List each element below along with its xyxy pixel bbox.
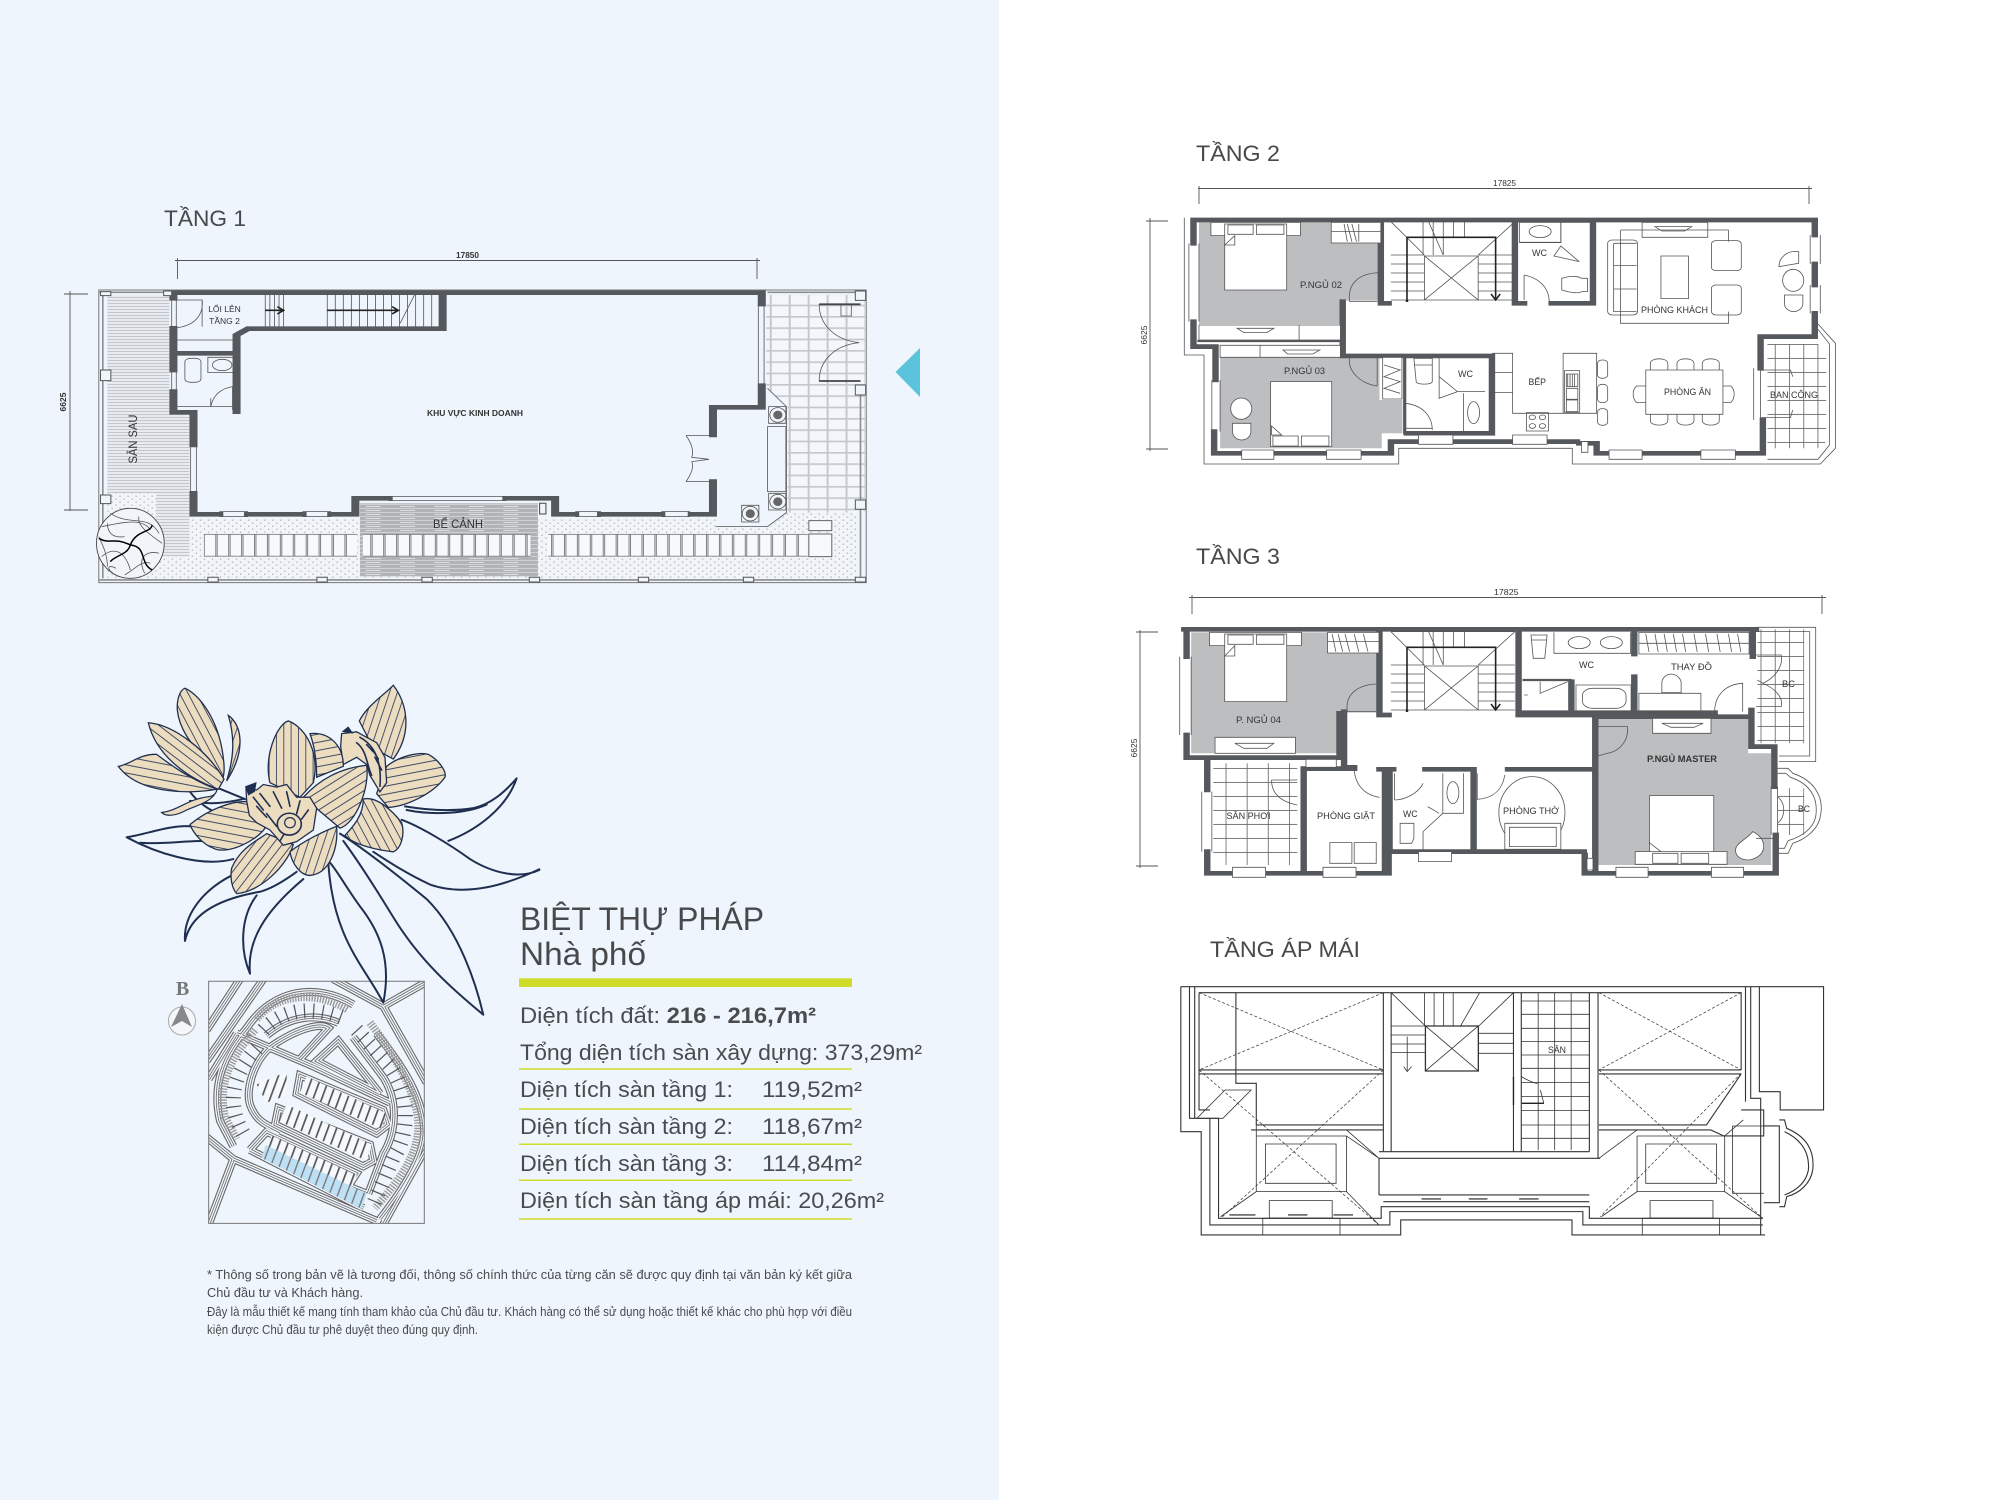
room labels: tầng 1: TẦNG 2: [209, 316, 240, 326]
room labels: tầng 1: [127, 303, 523, 531]
row: floor 1 area: Diện tích sàn tầng 1:: [520, 1077, 733, 1102]
dimension: depth 6625: [58, 291, 88, 511]
dimension: width 17850: [175, 250, 760, 279]
footnote: kiện được Chủ đầu tư phê duyệt theo đúng quy định.: [207, 1323, 478, 1337]
furniture: altar room: [1477, 773, 1565, 849]
room labels: tầng 1: LỐI LÊN: [208, 303, 241, 314]
entrance arrow: [896, 348, 920, 397]
room labels: tầng 3: SÂN PHƠI: [1226, 811, 1270, 821]
room labels: tầng 2: P.NGỦ 02: [1300, 279, 1342, 290]
row: floor 1 area: [519, 1077, 862, 1110]
dimension: depth 6625: 6625: [58, 392, 68, 411]
room labels: tầng 3: PHÒNG THỜ: [1503, 806, 1559, 816]
dimension: width 17825: 17825: [1493, 178, 1516, 188]
furniture: master bedroom: [1595, 718, 1764, 864]
furniture: laundry: [1272, 767, 1379, 863]
furniture: dressing room: [1639, 632, 1782, 712]
room labels: tầng 2: P.NGỦ 03: [1284, 365, 1325, 376]
room labels: tầng 3: P.NGỦ MASTER: [1647, 753, 1718, 764]
icon: north compass: [168, 978, 196, 1035]
drawing: tầng 2 walls and furniture: [1184, 218, 1835, 464]
furniture: wc upper: [1520, 222, 1592, 303]
dimension: width 17825: [1198, 178, 1812, 204]
icon: tree: [96, 508, 164, 578]
floor plan: tầng 3: [1129, 544, 1826, 877]
room labels: tầng 2: BẾP: [1528, 377, 1546, 387]
heading: tầng áp mái: TẦNG ÁP MÁI: [1210, 937, 1360, 962]
dimension: depth 6625: [1139, 218, 1168, 451]
furniture: lower wc: [1395, 773, 1463, 850]
room labels: tầng 2: BAN CÔNG: [1770, 390, 1818, 400]
room labels: tầng 3: WC: [1403, 809, 1418, 819]
site map with highlighted row: [207, 979, 428, 1224]
left panel background: [0, 0, 999, 1500]
room labels: tầng 1: BỂ CẢNH: [433, 518, 483, 531]
furniture: wc lower: [1414, 358, 1485, 433]
dimension: width 17850: 17850: [456, 250, 479, 260]
room labels: tầng 2: [1284, 248, 1818, 400]
footnote: [207, 1268, 852, 1337]
area specification list: [519, 1003, 922, 1220]
heading: tầng 1: TẦNG 1: [164, 206, 246, 231]
floor plan: tầng 2: [1139, 141, 1835, 464]
leaves: [127, 778, 539, 1015]
icon: north compass: B: [176, 978, 189, 1000]
footnote: Chủ đầu tư và Khách hàng.: [207, 1286, 363, 1300]
flower: left bud: [118, 688, 240, 792]
windows: bottom wall: [1242, 435, 1735, 459]
room labels: tầng 3: BC: [1782, 679, 1796, 689]
room labels: tầng 3: PHÒNG GIẶT: [1317, 811, 1376, 821]
footnote: Đây là mẫu thiết kế mang tính tham khảo của Chủ đầu tư. Khách hàng có thể sử dụng hoặc thiết kế khác cho phù hợp với điều: [207, 1304, 852, 1319]
floor plan: tầng 1: [58, 206, 866, 583]
row: land area: Diện tích đất: 216 - 216,7m²: [520, 1003, 816, 1028]
row: floor 3 area: [519, 1151, 862, 1181]
furniture: living room: [1608, 222, 1804, 323]
room labels: tầng 3: WC: [1579, 660, 1594, 670]
flower: right bloom: [341, 685, 445, 852]
dimension: depth 6625: 6625: [1139, 325, 1149, 344]
row: floor 3 area: Diện tích sàn tầng 3:: [520, 1151, 733, 1176]
drawing: attic roof lines: [1181, 987, 1824, 1235]
room labels: tầng 1: SÂN SAU: [127, 414, 140, 464]
room label: sân: SÂN: [1548, 1045, 1566, 1055]
furniture: kitchen: [1492, 353, 1608, 431]
room labels: tầng 3: BC: [1798, 804, 1810, 814]
row: floor 1 area: 119,52m²: [762, 1077, 862, 1102]
heading: nhà phố: Nhà phố: [520, 936, 646, 972]
room labels: tầng 2: WC: [1532, 248, 1547, 258]
room labels: tầng 2: WC: [1458, 369, 1473, 379]
room labels: tầng 3: [1226, 660, 1810, 821]
windows: bottom and top: [1233, 759, 1744, 877]
title block: [519, 901, 852, 987]
furniture: dining table: [1633, 359, 1734, 425]
room labels: tầng 3: P. NGỦ 04: [1236, 714, 1281, 725]
heading: tầng 3: TẦNG 3: [1196, 544, 1280, 569]
heading: biệt thự pháp: BIỆT THỰ PHÁP: [520, 901, 764, 937]
row: attic area: Diện tích sàn tầng áp mái: 20,26m²: [520, 1188, 884, 1213]
dimension: width 17825: [1189, 587, 1826, 614]
dimension: depth 6625: [1129, 630, 1158, 868]
room labels: tầng 3: THAY ĐỒ: [1671, 661, 1712, 672]
row: floor 3 area: 114,84m²: [762, 1151, 862, 1176]
row: total floor area: Tổng diện tích sàn xây dựng: 373,29m²: [520, 1040, 922, 1065]
room labels: tầng 1: KHU VỰC KINH DOANH: [427, 408, 523, 418]
row: floor 2 area: Diện tích sàn tầng 2:: [520, 1114, 733, 1139]
heading: tầng 2: TẦNG 2: [1196, 141, 1280, 166]
dimension: depth 6625: 6625: [1129, 738, 1139, 757]
floor plan: tầng áp mái: [1181, 937, 1824, 1235]
row: floor 2 area: [519, 1114, 862, 1145]
dimension: width 17825: 17825: [1494, 587, 1519, 597]
furniture: bedroom 04: [1210, 632, 1379, 753]
furniture: bedroom 03: [1220, 345, 1432, 447]
accent bar: [519, 978, 852, 987]
row: floor 2 area: 118,67m²: [762, 1114, 862, 1139]
flower: centre bloom: [190, 721, 367, 894]
room labels: tầng 2: PHÒNG ĂN: [1664, 387, 1711, 397]
room labels: tầng 2: PHÒNG KHÁCH: [1641, 305, 1708, 315]
furniture: bedroom 02: [1199, 222, 1381, 340]
footnote: * Thông số trong bản vẽ là tương đối, thông số chính thức của từng căn sẽ được quy định tại văn bản ký kết giữa: [207, 1268, 852, 1282]
furniture: upper wc: [1524, 632, 1631, 712]
drawing: tầng 3 walls and furniture: [1180, 627, 1821, 877]
drawing: tầng 1 walls and furniture: [96, 290, 866, 583]
illustration: orchid flowers: [118, 685, 539, 1015]
